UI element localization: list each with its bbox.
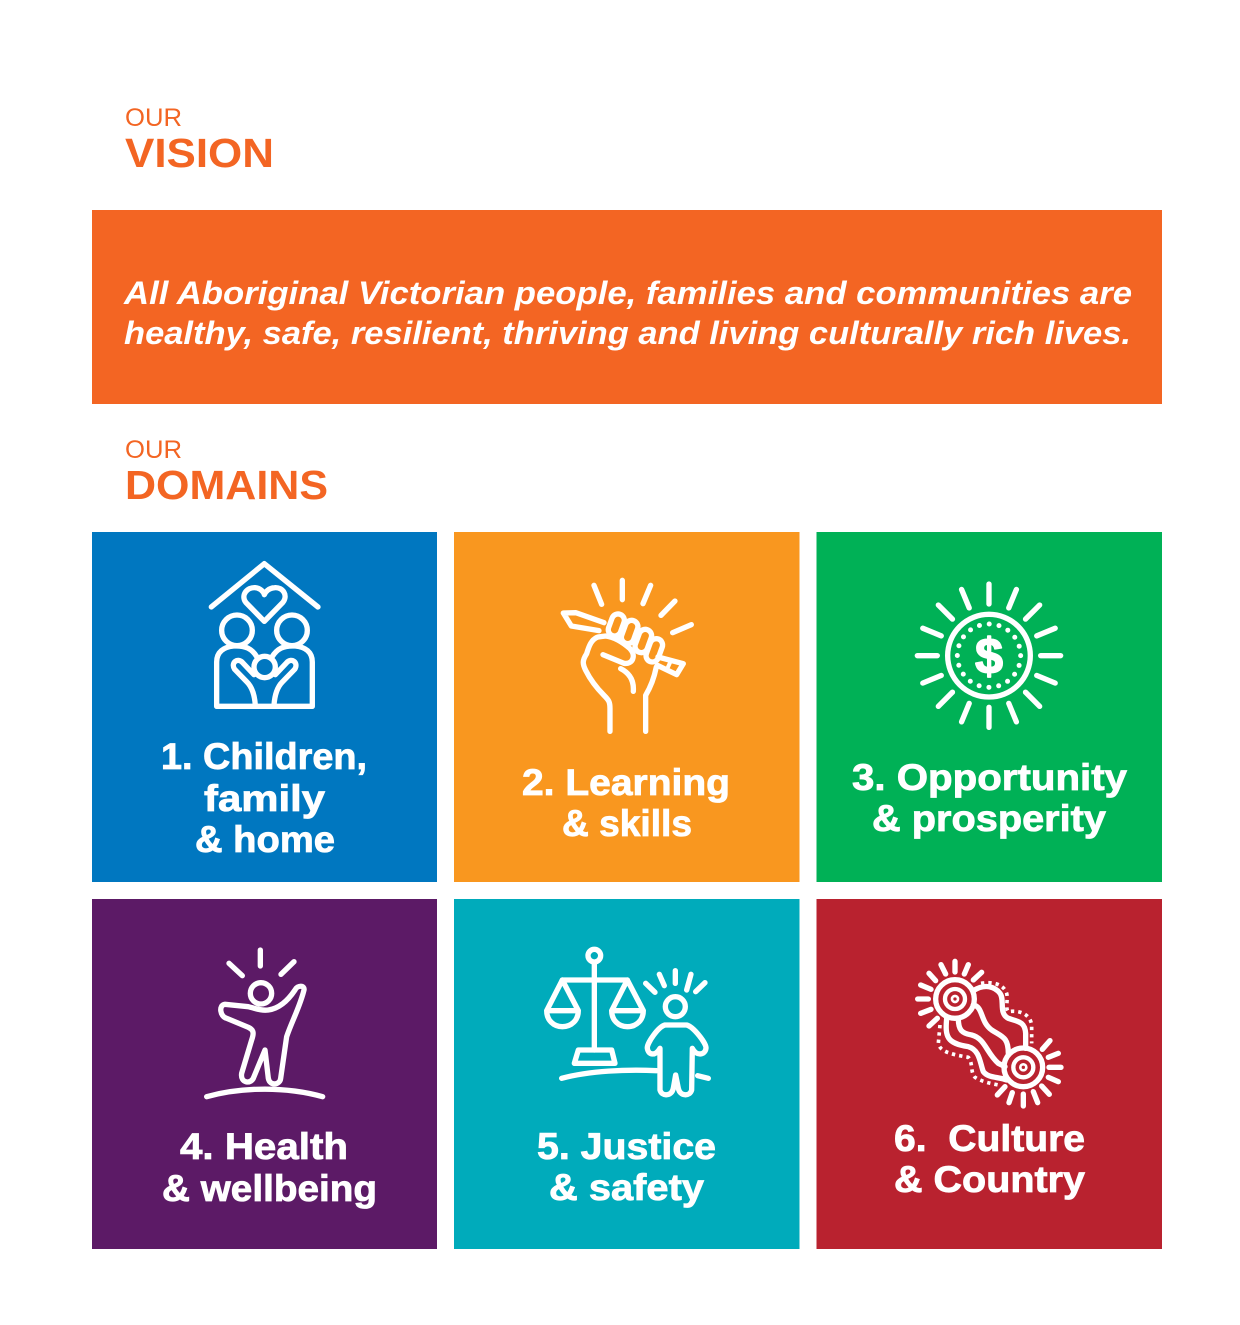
label: 5. Justice and safety: 5. Justice: [537, 1126, 716, 1167]
label: 3. Opportunity and prosperity: & prosperity: [872, 798, 1106, 839]
label: 5. Justice and safety: [537, 1126, 716, 1208]
label: 1. Children, family and home: [161, 736, 367, 860]
panel: vision statement: All Aboriginal Victorian people, families and communities are: [123, 275, 1132, 311]
label: 1. Children, family and home: & home: [195, 819, 335, 860]
panel: domain 5 justice and safety: [454, 899, 800, 1249]
heading: our domains: [125, 436, 328, 508]
panel: domain 2 learning and skills: [454, 532, 800, 882]
icon: family in a house with heart: [211, 564, 318, 706]
icon: fist holding a pencil: [563, 580, 691, 731]
label: 4. Health and wellbeing: & wellbeing: [162, 1168, 377, 1209]
label: 6. Culture and Country: & Country: [894, 1159, 1085, 1200]
panel: domain 3 opportunity and prosperity: [816, 532, 1162, 882]
label: 5. Justice and safety: & safety: [549, 1167, 704, 1208]
label: 2. Learning and skills: 2. Learning: [522, 762, 730, 803]
label: 1. Children, family and home: family: [204, 778, 325, 819]
icon: scales of justice and person: [547, 949, 708, 1095]
label: 2. Learning and skills: [522, 762, 730, 844]
heading: our domains: OUR: [125, 436, 182, 464]
heading: our vision: OUR: [125, 104, 182, 132]
label: 6. Culture and Country: [894, 1118, 1085, 1200]
label: 3. Opportunity and prosperity: 3. Opportunity: [852, 757, 1127, 798]
label: 4. Health and wellbeing: 4. Health: [180, 1126, 348, 1167]
icon: Aboriginal art circles and waves: [918, 961, 1061, 1106]
label: 4. Health and wellbeing: [162, 1126, 377, 1209]
icon: dollar coin with sun rays: $: [975, 628, 1003, 684]
heading: our vision: [125, 104, 274, 176]
label: 2. Learning and skills: & skills: [562, 803, 692, 844]
label: 3. Opportunity and prosperity: [852, 757, 1127, 839]
label: 1. Children, family and home: 1. Children,: [161, 736, 367, 777]
panel: vision statement: healthy, safe, resilient, thriving and living culturally rich lives.: [124, 315, 1131, 351]
panel: vision statement: [92, 210, 1162, 404]
heading: our domains: DOMAINS: [125, 462, 328, 508]
icon: joyful person with arm raised: [207, 950, 323, 1097]
panel: domain 1 children, family and home: [92, 532, 437, 882]
panel: domain 6 culture and country: [816, 899, 1162, 1249]
panel: domain 4 health and wellbeing: [92, 899, 437, 1249]
heading: our vision: VISION: [125, 130, 274, 176]
label: 6. Culture and Country: 6. Culture: [894, 1118, 1085, 1159]
icon: dollar coin with sun rays: [917, 584, 1061, 727]
